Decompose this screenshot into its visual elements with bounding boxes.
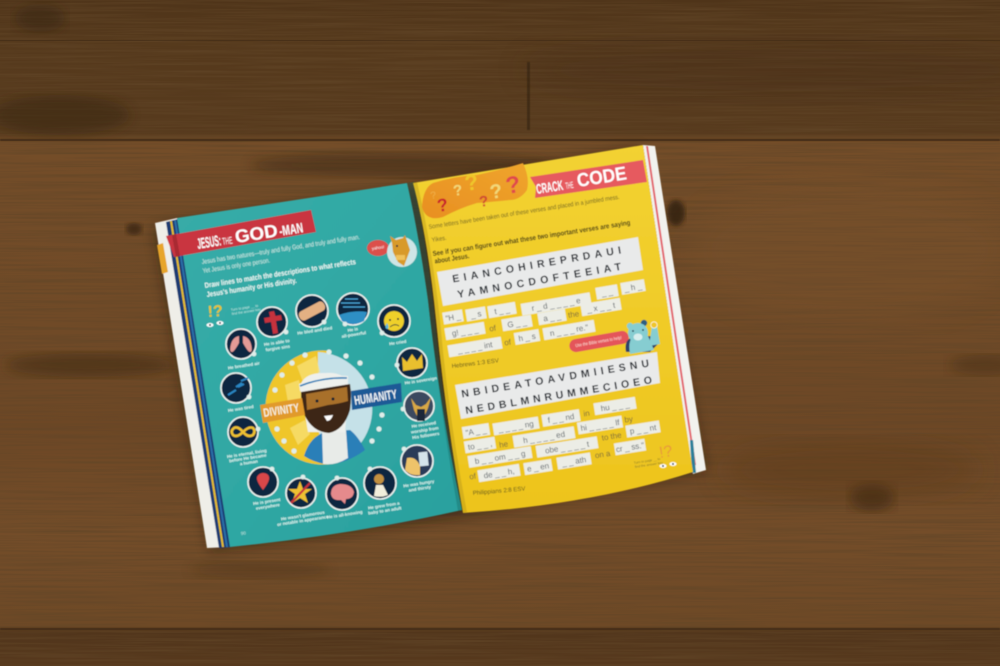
intro text <box>201 234 360 275</box>
icon: hungry and thirsty <box>401 445 433 477</box>
label: sovereign: He is sovereign <box>404 375 437 386</box>
orange blob with question marks: ? <box>478 193 490 211</box>
orange blob with question marks <box>422 163 528 218</box>
verse 2 word blanks: p _ _ nt <box>629 423 658 436</box>
headband <box>299 376 348 391</box>
verse 2 word blanks: to _ _ , <box>467 439 493 452</box>
letter box 1: YAMNOCDOFTEEIAT <box>456 261 623 301</box>
verse 2 word blanks: "A _ _ <box>465 425 488 438</box>
instruction text <box>204 257 356 299</box>
verse 2 word blanks: by <box>624 414 633 425</box>
orange blob with question marks: ? <box>504 171 522 200</box>
verse 2 word blanks: on a <box>594 449 612 460</box>
answer hint icon right <box>634 443 676 469</box>
label: forgive: forgive sins <box>265 344 291 352</box>
title banner: THE <box>565 180 574 191</box>
label: eternal: before He became <box>229 453 267 463</box>
label: eternal: a human <box>239 459 258 466</box>
label: eternal: He is eternal, living <box>227 448 267 459</box>
verse 2 word blanks: f _ _ nd <box>547 412 575 425</box>
humanity label: HUMANITY <box>353 386 398 408</box>
citation 2: Philippians 2:8 ESV <box>473 486 526 497</box>
verse 1 word blanks: g! _ _ _ <box>451 325 480 338</box>
verse 2 word blanks: b _ _ om _ _ g <box>474 449 526 466</box>
icon: bear <box>626 320 660 354</box>
label: grew: baby to an adult <box>368 505 402 516</box>
instruction text: See if you can figure out what these two important verses are saying <box>432 220 631 258</box>
verse 1 word blanks: of <box>489 323 497 334</box>
citation 1: Hebrews 1:3 ESV <box>452 358 499 370</box>
verse 1 word blanks: r _ d _ _ _ _ e <box>531 296 582 313</box>
label: grew <box>368 500 402 516</box>
page number: 90 <box>241 530 247 536</box>
verse 2 word blanks: e _ en <box>526 461 550 474</box>
verse 1 word blanks: h _ s <box>518 332 536 343</box>
title banner: THE <box>222 236 234 248</box>
verse 1 word blanks: _ _ _ _ int <box>456 340 494 355</box>
icon: bandage <box>296 295 328 327</box>
instruction text <box>432 220 631 265</box>
icon: crying face <box>378 305 410 337</box>
icon: infinity <box>228 417 260 447</box>
label: worship <box>410 420 440 440</box>
label: everywhere: He is present <box>253 497 281 506</box>
orange blob with question marks: ? <box>435 194 449 216</box>
answer hint icon left <box>206 303 261 327</box>
label: glamorous: or notable in appearance <box>277 514 329 527</box>
orange blob with question marks: ? <box>463 169 480 196</box>
icon: baby <box>364 467 396 499</box>
intro text: Yikes. <box>431 235 447 244</box>
label: worship: worship from <box>410 425 439 435</box>
label: worship: His followers <box>412 431 440 440</box>
central Jesus medallion <box>260 349 402 464</box>
callout: Bible verses hint <box>568 330 630 353</box>
answer hint icon left: find the answer key <box>232 307 261 316</box>
orange blob with question marks: ? <box>430 190 437 202</box>
verse 2 word blanks: _ _ _ _ ng <box>497 419 534 434</box>
verse 1 word blanks: _ s <box>469 309 482 320</box>
verse 1 word blanks: G _ _ <box>507 317 528 330</box>
letter box 2 <box>455 352 660 419</box>
yellow page <box>413 145 693 513</box>
verse 1 word blanks: a _ _ <box>543 311 562 323</box>
icon: sleeping zzz <box>221 373 251 403</box>
title banner: GOD <box>233 220 279 247</box>
verse 1 word blanks <box>442 279 646 357</box>
title banner: JESUS: <box>196 232 222 253</box>
title banner: -MAN <box>278 219 304 239</box>
verse 1 word blanks: t _ _ <box>494 305 511 316</box>
verse 2 word blanks: hi _ _ _ _ lf <box>580 418 621 433</box>
robe <box>304 430 365 464</box>
verse 2 word blanks: in <box>583 409 590 418</box>
title banner: CODE <box>575 163 628 192</box>
answer hint icon right: !? <box>658 443 674 462</box>
instruction text: Draw lines to match the descriptions to what reflects <box>204 257 356 290</box>
label: all-powerful <box>341 326 366 339</box>
label: all-powerful: all-powerful <box>341 330 366 339</box>
answer hint icon left: Turn to page __ to <box>231 304 259 312</box>
icon: cross <box>257 307 288 337</box>
verse 2 word blanks: hu _ _ _ <box>600 400 631 413</box>
icon: crown <box>395 348 427 378</box>
label: bled: He bled and died <box>297 325 333 336</box>
verse 2 word blanks: obe _ _ _ _ t <box>544 439 591 455</box>
label: all-powerful: He is <box>347 326 359 333</box>
icon: wind and waves <box>337 293 369 326</box>
verse 1 word blanks: of <box>504 337 512 348</box>
label: forgive <box>264 338 291 352</box>
verse 1 word blanks: _ x _ _ t <box>585 301 617 314</box>
label: hungry: and thirsty <box>408 484 432 493</box>
panel: right page <box>413 145 706 513</box>
donkey speech bubble: yahoo! <box>371 244 385 251</box>
letter box 1: EIANCOHIREPRDAUI <box>451 245 622 285</box>
label: breathed: He breathed air <box>228 361 260 370</box>
page edge white <box>643 145 706 474</box>
verse 2 word blanks: de _ _ h, <box>483 467 515 480</box>
label: hungry <box>403 479 435 493</box>
instruction text: Jesus's humanity or His divinity. <box>206 276 297 299</box>
head cloth <box>300 373 349 432</box>
answer hint icon right: Turn to page __ to <box>634 457 661 465</box>
label: worship: He received <box>411 420 437 429</box>
divinity label: DIVINITY <box>262 401 300 420</box>
label: hungry: He was hungry <box>403 479 435 488</box>
answer hint icon right: find the answer key <box>635 461 664 469</box>
orange blob with question marks: ? <box>488 180 504 204</box>
dots around medallion <box>272 349 385 454</box>
callout: Bible verses hint: Use the Bible verses to help! <box>575 335 622 348</box>
letter box 2: NBIDEATOAVDMIIESNU <box>461 358 650 400</box>
verse 2 word blanks: h _ _ _ _ ed <box>523 430 566 445</box>
icon: brain <box>326 476 358 510</box>
face <box>301 384 351 433</box>
label: tired: He was tired <box>228 404 254 413</box>
icon: lungs <box>226 329 256 359</box>
label: everywhere <box>253 497 281 511</box>
title banner <box>166 210 316 257</box>
label: grew: He grew from a <box>368 500 400 510</box>
label: cried: He cried <box>389 339 407 346</box>
instruction text: about Jesus. <box>434 253 470 265</box>
icon: donkey <box>387 235 417 267</box>
verse 2 word blanks: he <box>499 439 509 450</box>
intro text: Yet Jesus is only one person. <box>202 257 271 275</box>
verse 2 word blanks: _ _ ath <box>560 455 587 468</box>
verse 1 word blanks: _ h _ <box>623 281 643 294</box>
letter box 1 <box>437 237 643 306</box>
verse 2 word blanks: to the <box>601 430 623 443</box>
humanity label <box>351 383 402 410</box>
teal page <box>177 183 462 547</box>
verse 2 word blanks <box>462 397 661 482</box>
intro text: Jesus has two natures—truly and fully God, and truly and fully man. <box>201 234 360 266</box>
intro text: Some letters have been taken out of these verses and placed in a jumbled mess. <box>428 194 620 231</box>
icon: map pin <box>248 467 278 497</box>
verse 2 word blanks: cr _ ss." <box>615 441 645 454</box>
icon: raised hands <box>401 391 434 421</box>
verse 1 word blanks: "H _ <box>445 312 462 323</box>
intro text <box>428 194 620 244</box>
verse 1 word blanks: _ _ <box>600 287 614 298</box>
verse 2 word blanks: of <box>469 471 477 481</box>
panel: left page <box>155 182 464 548</box>
verse 1 word blanks: the <box>567 309 580 320</box>
orange blob with question marks: ? <box>452 182 464 200</box>
title banner <box>530 160 647 198</box>
page edge stack <box>155 218 231 548</box>
label: everywhere: everywhere <box>255 502 281 511</box>
label: eternal <box>227 448 267 466</box>
magazine shadow <box>154 148 706 551</box>
letter box 2: NEDBLMNRUMMECIOEO <box>465 374 653 417</box>
donkey speech bubble <box>367 240 389 256</box>
label: all-knowing: He is all-knowing <box>327 509 363 520</box>
divinity label <box>260 398 305 423</box>
icon: crossed star <box>286 475 316 508</box>
label: forgive: He is able to <box>264 338 290 347</box>
answer hint icon left: !? <box>207 303 223 321</box>
label: glamorous: He wasn't glamorous <box>281 510 325 521</box>
title banner: CRACK <box>535 177 564 197</box>
verse 1 word blanks: n _ _ _ re." <box>549 323 589 338</box>
